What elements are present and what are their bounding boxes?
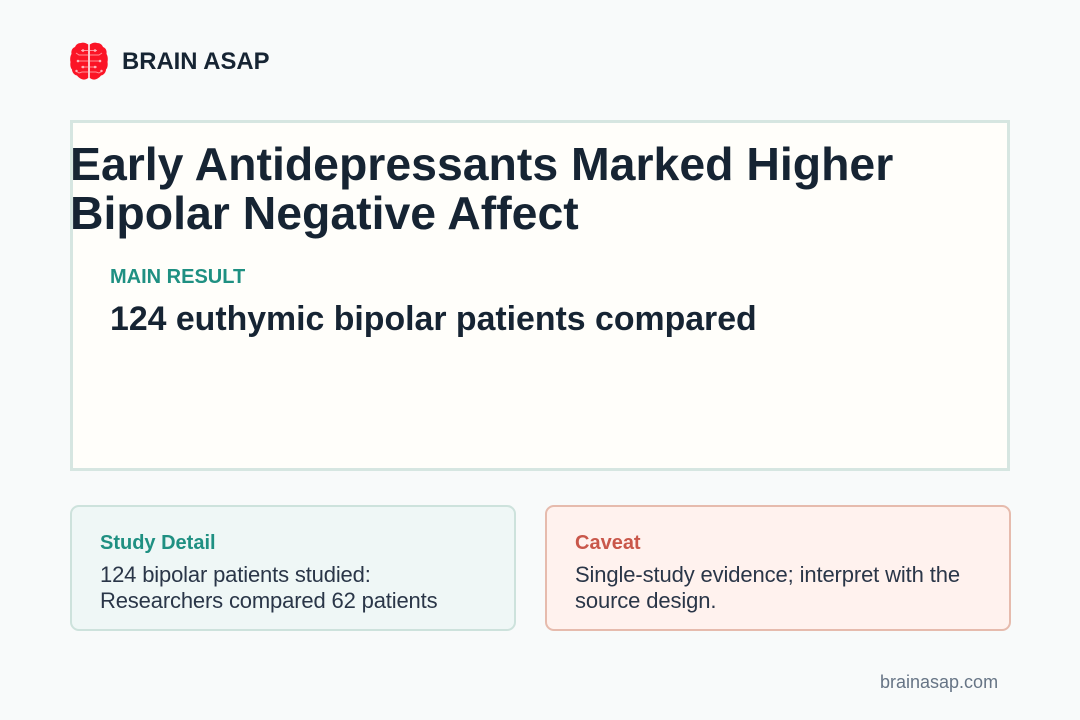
footer: website: brainasap.com	[880, 672, 998, 692]
text: study detail	[100, 562, 437, 613]
heading: study detail: Study Detail	[100, 532, 216, 554]
title	[70, 138, 893, 239]
key statement: 124 euthymic bipolar patients compared	[110, 300, 757, 338]
text: caveat: source design.	[575, 588, 716, 613]
header: logo and brand	[70, 42, 270, 80]
text: caveat	[575, 562, 960, 613]
text: study detail: 124 bipolar patients studied:	[100, 562, 371, 587]
title: Bipolar Negative Affect	[70, 187, 579, 239]
panel: caveat	[545, 505, 1011, 631]
panel: main result	[70, 120, 1010, 471]
heading: caveat: Caveat	[575, 532, 641, 554]
icon: red brain	[70, 42, 108, 80]
title: Early Antidepressants Marked Higher	[70, 138, 893, 190]
text: caveat: Single-study evidence; interpret with the	[575, 562, 960, 587]
label: main result: MAIN RESULT	[110, 266, 245, 288]
brand name: BRAIN ASAP	[122, 48, 270, 75]
panel: study detail	[70, 505, 516, 631]
text: study detail: Researchers compared 62 patients	[100, 588, 437, 613]
